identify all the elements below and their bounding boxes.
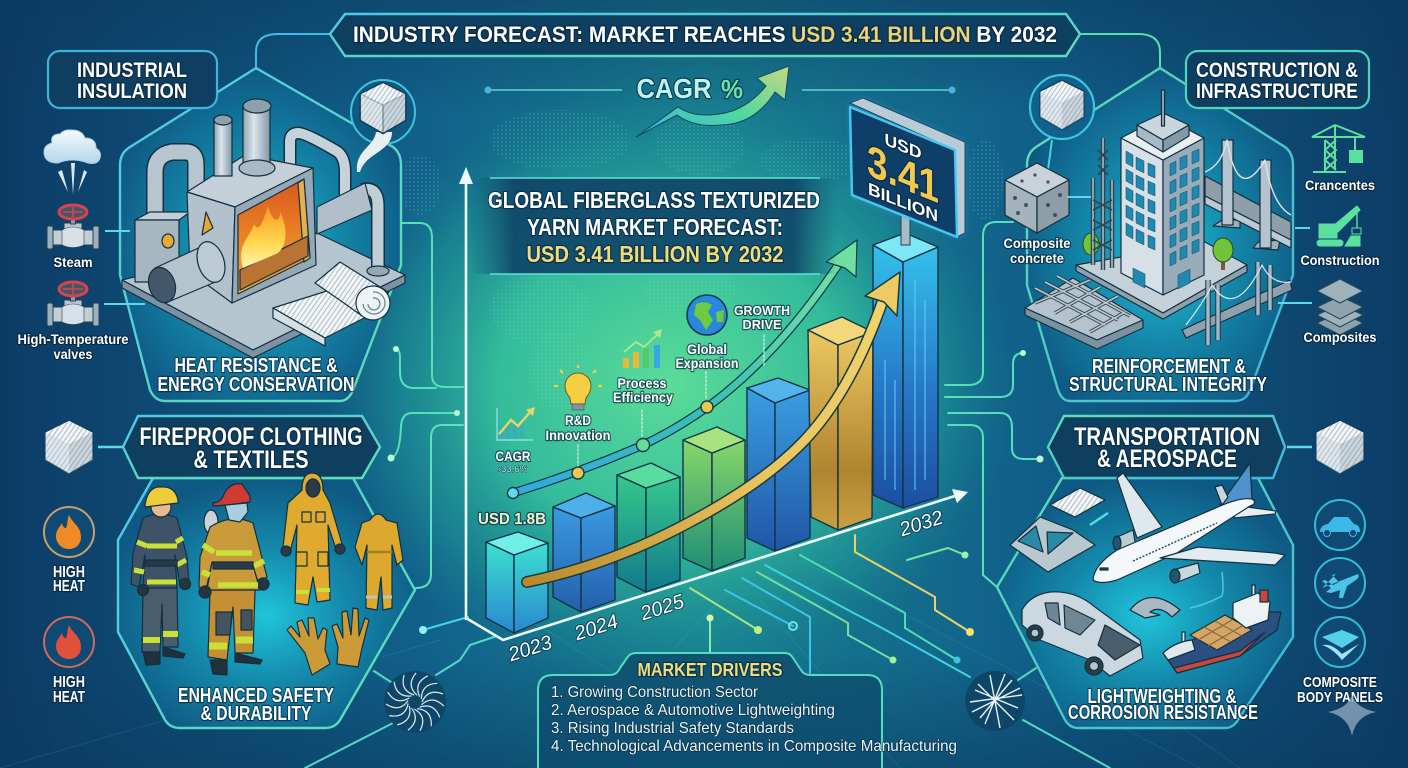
panel: construction and infrastructure	[1004, 51, 1380, 401]
list: drivers	[551, 684, 957, 755]
bar 2032	[873, 233, 938, 508]
icon: tower crane	[1312, 125, 1365, 172]
list: drivers: 4. Technological Advancements in Composite Manufacturing	[551, 738, 957, 755]
bar 2024	[553, 493, 615, 612]
year labels: 2025	[637, 590, 688, 626]
illustration: car frame	[1022, 592, 1143, 676]
icon: excavator	[1317, 206, 1361, 246]
arrow: CAGR growth	[636, 66, 789, 137]
icon: process chart	[623, 329, 662, 368]
green trend arrow	[508, 240, 857, 498]
icon: globe	[687, 295, 727, 335]
left pipe	[155, 152, 196, 218]
heading: transportation and aerospace: TRANSPORTATION	[1074, 423, 1260, 451]
illustration: yellow hooded coverall	[281, 473, 345, 605]
label: high heat: HEAT	[53, 578, 85, 595]
panel: transportation and aerospace	[965, 416, 1383, 736]
illustration: scaffold	[1093, 138, 1112, 270]
illustration: rebar slab	[1025, 276, 1143, 349]
label: construction: Construction	[1300, 252, 1380, 268]
label: R&D innovation: R&D	[565, 412, 591, 428]
icon: steam valve	[47, 205, 99, 270]
heading: industrial insulation: INSULATION	[77, 80, 187, 103]
label: steam: Steam	[54, 254, 92, 270]
text: enhanced safety	[178, 685, 335, 725]
text: lightweighting: LIGHTWEIGHTING &	[1088, 686, 1236, 708]
list: drivers: 2. Aerospace & Automotive Lightweighting	[551, 702, 835, 719]
label: composite concrete: concrete	[1010, 250, 1064, 266]
icon: composite sheets	[1315, 617, 1365, 667]
label: high heat	[53, 674, 85, 706]
label: composite body panels	[1297, 674, 1383, 706]
label: R&D innovation: Innovation	[546, 427, 610, 443]
text: lightweighting: CORROSION RESISTANCE	[1068, 702, 1258, 724]
text: reinforcement	[1069, 356, 1268, 396]
text: enhanced safety: & DURABILITY	[200, 703, 312, 725]
text: enhanced safety: ENHANCED SAFETY	[178, 685, 335, 707]
bar 2027	[747, 378, 810, 551]
heading: transportation and aerospace: & AEROSPACE	[1097, 445, 1237, 473]
bar 2023	[486, 532, 548, 633]
label: process efficiency	[613, 375, 673, 405]
right upper pipe	[290, 133, 345, 195]
text: reinforcement: REINFORCEMENT &	[1092, 356, 1246, 378]
value sign: USD 3.41 billion	[850, 98, 965, 245]
icon: sparkle	[1328, 695, 1376, 736]
year labels	[505, 507, 946, 667]
label: high-temperature valves: High-Temperature	[18, 331, 129, 347]
text: heat resistance: HEAT RESISTANCE &	[174, 355, 338, 377]
icon: car	[1315, 500, 1365, 550]
icon: fiber spiral	[384, 671, 446, 733]
label: composites: Composites	[1304, 329, 1377, 345]
year labels: 2023	[505, 632, 555, 667]
illustration: office tower	[1121, 90, 1204, 295]
icon: high heat red	[44, 617, 94, 706]
illustration: large bridge	[1205, 140, 1291, 250]
panel: market drivers	[538, 653, 957, 768]
CAGR heading	[484, 73, 956, 104]
chart title block: GLOBAL FIBERGLASS TEXTURIZED	[488, 187, 820, 213]
illustration: firefighter in dark gear	[131, 487, 190, 665]
label: crancentes: Crancentes	[1305, 177, 1375, 193]
illustration: curved parts	[1130, 598, 1180, 618]
label: composite concrete	[1004, 235, 1071, 266]
panel outline	[1027, 68, 1293, 401]
text: lightweighting	[1068, 686, 1258, 724]
illustration: car shell	[1010, 517, 1095, 572]
panel outline	[118, 478, 415, 728]
panel outline	[120, 68, 401, 401]
heading: industrial insulation: INDUSTRIAL	[77, 59, 187, 82]
heading: fireproof clothing: FIREPROOF CLOTHING	[140, 423, 362, 451]
heading: fireproof clothing	[123, 416, 380, 478]
world map dots	[398, 110, 1003, 410]
label: process efficiency: Efficiency	[613, 389, 673, 405]
label: global expansion: Expansion	[676, 355, 738, 371]
right big pipe	[362, 189, 378, 268]
illustration: airplane	[1093, 463, 1285, 583]
value sign: USD 3.41 billion: BILLION	[868, 179, 938, 226]
panel: fireproof clothing	[44, 416, 446, 733]
label: composite concrete: Composite	[1004, 235, 1071, 251]
heading: market drivers: MARKET DRIVERS	[638, 660, 782, 680]
illustration: second coverall	[355, 514, 403, 610]
icon: fiber cube	[45, 420, 93, 474]
label: high-temperature valves	[18, 331, 129, 362]
icon: steam cloud	[44, 130, 100, 195]
illustration: base plate	[1076, 242, 1247, 319]
CAGR heading: CAGR	[636, 73, 712, 104]
label: process efficiency: Process	[618, 375, 667, 391]
heading: construction and infrastructure: CONSTRUCTION &	[1196, 59, 1358, 82]
panel outline	[997, 478, 1293, 728]
label: high heat: HEAT	[53, 689, 85, 706]
year labels: 2024	[571, 611, 621, 646]
icon: fiber cube	[1316, 420, 1364, 474]
value sign: USD 3.41 billion: 3.41	[867, 135, 939, 213]
label: CAGR rate: CAGR	[496, 448, 530, 464]
icon: light bulb	[554, 365, 602, 410]
label: high heat: HIGH	[53, 674, 85, 691]
label: high-temperature valves: valves	[54, 346, 93, 362]
heading: construction and infrastructure	[1186, 51, 1369, 108]
gold growth arrow	[527, 272, 900, 582]
icon: plane	[1315, 558, 1365, 608]
panel: industrial insulation	[18, 51, 415, 401]
text: reinforcement: STRUCTURAL INTEGRITY	[1069, 374, 1268, 396]
label: high heat	[53, 564, 85, 595]
chart title block: YARN MARKET FORECAST:	[527, 214, 783, 240]
value sign: USD 3.41 billion: USD	[884, 129, 922, 163]
heading: industrial insulation	[48, 51, 217, 108]
list: drivers: 3. Rising Industrial Safety Standards	[551, 720, 794, 737]
connector nodes	[388, 346, 1044, 664]
label: growth drive: DRIVE	[742, 317, 782, 332]
text: heat resistance: ENERGY CONSERVATION	[158, 374, 354, 396]
list: drivers: 1. Growing Construction Sector	[551, 684, 759, 701]
label: CAGR rate	[496, 448, 530, 474]
title banner	[330, 14, 1080, 56]
icon: CAGR chart	[497, 407, 535, 440]
icon: fiber tangle	[965, 671, 1025, 731]
label: composite body panels: COMPOSITE	[1303, 674, 1377, 691]
illustration: container ship	[1163, 585, 1281, 673]
chart: market growth bars	[459, 167, 968, 667]
illustration: tree right	[1213, 238, 1233, 270]
label: high heat: HIGH	[53, 564, 85, 581]
label: CAGR rate: ›33.6%	[498, 464, 528, 474]
icon: high temperature valve	[18, 282, 129, 362]
bar 2028 gold	[808, 317, 873, 530]
chart title block	[470, 178, 838, 274]
year labels: 2032	[896, 507, 946, 542]
CAGR heading: %	[721, 74, 743, 104]
illustration: small bridge	[1182, 262, 1292, 345]
illustration: gloves	[287, 608, 369, 675]
label: composite body panels: BODY PANELS	[1297, 689, 1383, 706]
title banner: INDUSTRY FORECAST: MARKET REACHES USD 3.41 BILLION BY 2032	[353, 22, 1057, 47]
text: heat resistance	[158, 355, 354, 396]
icon: composite layers	[1317, 279, 1363, 335]
label: start value: USD 1.8B	[478, 511, 546, 528]
illustration: tree left	[1083, 233, 1099, 255]
heading: construction and infrastructure: INFRASTRUCTURE	[1196, 80, 1358, 103]
icon: fiber cube in circle	[1030, 75, 1094, 177]
bar 2025	[617, 463, 680, 592]
illustration: flat panel	[1050, 488, 1105, 517]
label: R&D innovation	[546, 412, 610, 443]
chart title block: USD 3.41 BILLION BY 2032	[526, 241, 784, 267]
heading: fireproof clothing: & TEXTILES	[194, 446, 308, 474]
heading: transportation and aerospace	[1048, 416, 1285, 478]
furnace illustration	[122, 80, 415, 358]
axes	[459, 167, 968, 640]
label: growth drive	[734, 303, 790, 332]
circuit connectors	[256, 34, 1160, 768]
icon: composite concrete block	[1005, 163, 1069, 233]
bar 2026	[683, 427, 745, 571]
label: global expansion	[676, 341, 738, 371]
label: global expansion: Global	[687, 341, 727, 357]
icon: high heat orange	[44, 507, 94, 595]
illustration: firefighter in tan gear	[199, 484, 269, 675]
label: growth drive: GROWTH	[734, 303, 790, 318]
